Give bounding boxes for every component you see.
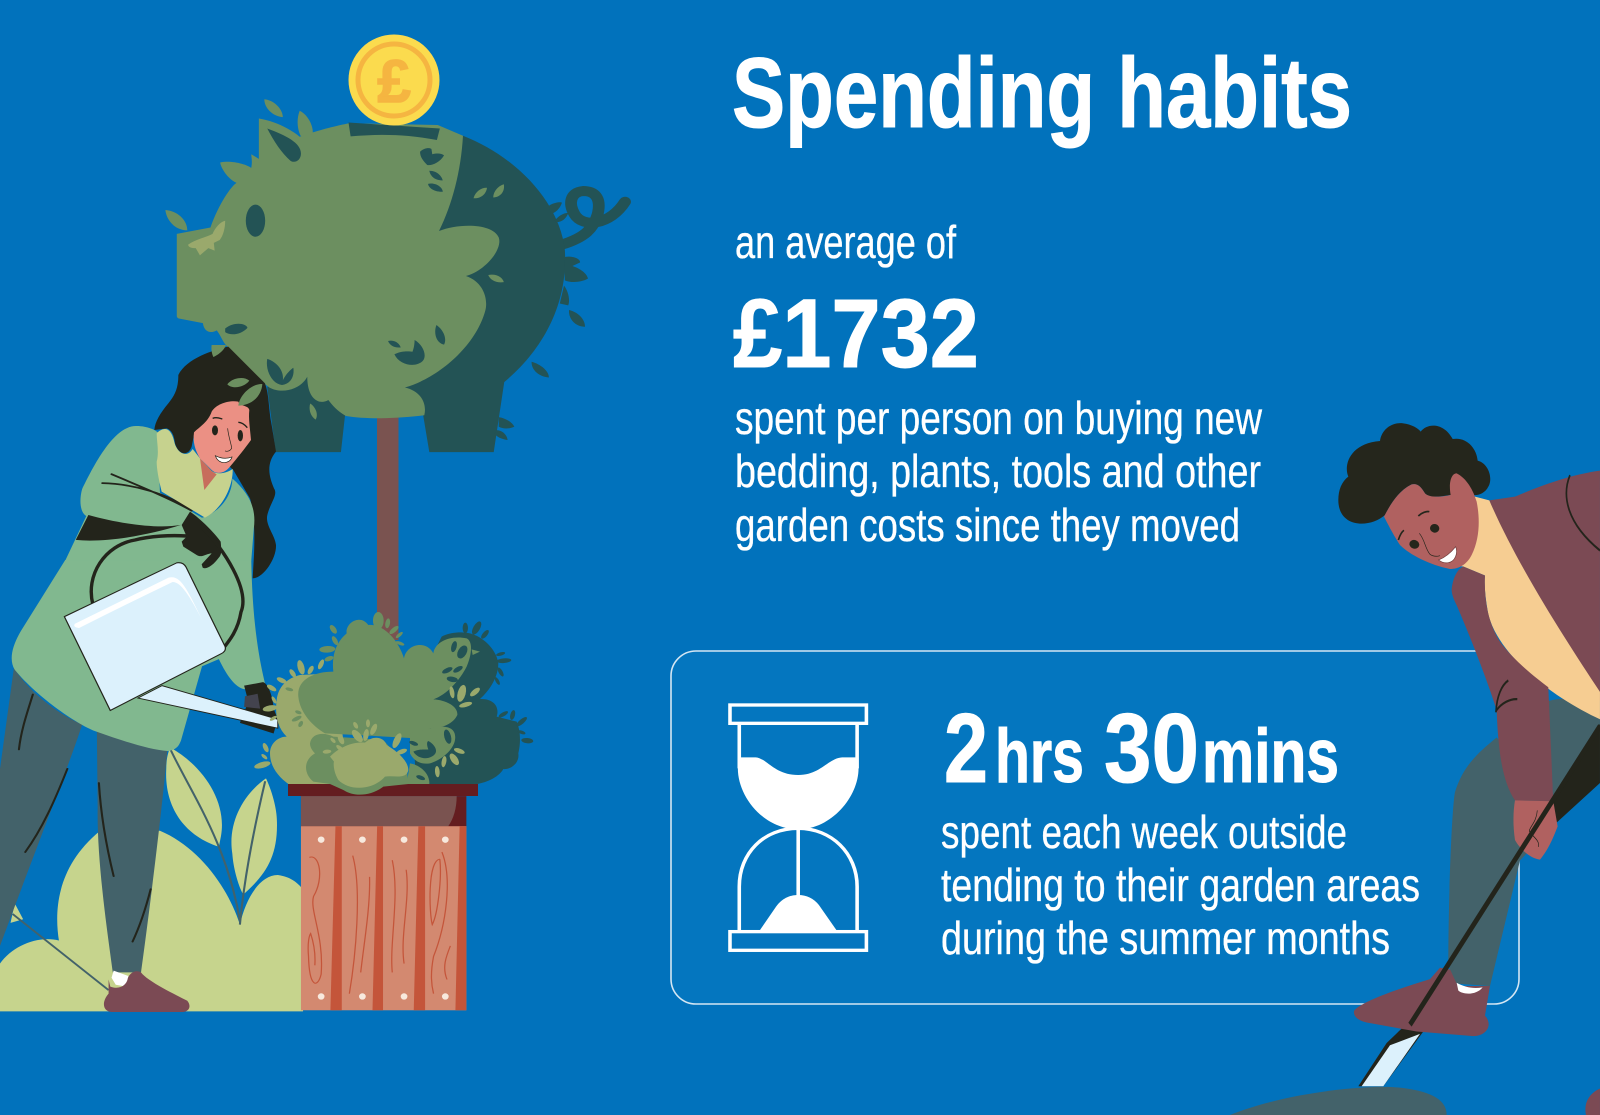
stat: 2hrs 30mins: mins — [1202, 714, 1339, 799]
text: an average of: an average of — [735, 216, 956, 268]
illustration: pot rim — [288, 784, 478, 796]
illustration: man with shovel — [1230, 423, 1600, 1115]
stat: £1732: £1732 — [733, 279, 979, 388]
icon: pound coin — [348, 34, 440, 126]
text: time description — [941, 806, 1420, 964]
panel: time outline box — [671, 651, 1519, 1004]
illustration: potted shrub — [254, 612, 534, 795]
text: time description: tending to their garden areas — [941, 859, 1420, 911]
tree stem — [377, 415, 398, 640]
stat: 2hrs 30mins: 30 — [1104, 693, 1199, 803]
stat: 2hrs 30mins: 2 — [944, 693, 988, 803]
text: spending description — [735, 392, 1263, 551]
man body — [1230, 471, 1600, 1115]
text: time description: during the summer months — [941, 912, 1390, 964]
woman hair — [154, 347, 276, 578]
illustration: bush background and leaves — [0, 748, 303, 1011]
woman trousers — [0, 668, 189, 1012]
text: time description: spent each week outside — [941, 806, 1347, 858]
stat: 2hrs 30mins: hrs — [995, 714, 1084, 799]
text: spending description: spent per person on buying new — [735, 392, 1263, 444]
illustration: woman watering — [0, 345, 278, 1012]
woman jacket lower — [12, 560, 265, 751]
piggy topiary shapes — [165, 99, 625, 452]
text: spending description: garden costs since they moved — [735, 499, 1240, 551]
illustration: plant pot — [301, 796, 466, 1010]
icon: hourglass — [730, 705, 866, 950]
text: spending description: bedding, plants, tools and other — [735, 445, 1261, 497]
icon: pound coin: £ — [377, 48, 411, 115]
woman face and scarf — [157, 345, 262, 568]
man head — [1338, 423, 1490, 569]
watering can — [64, 563, 278, 733]
watering can handle — [91, 525, 243, 650]
illustration: piggy bank topiary — [165, 99, 625, 640]
stat: 2hrs 30mins — [944, 693, 1339, 803]
woman jacket upper — [65, 426, 254, 561]
heading: Spending habits: Spending habits — [732, 37, 1352, 148]
